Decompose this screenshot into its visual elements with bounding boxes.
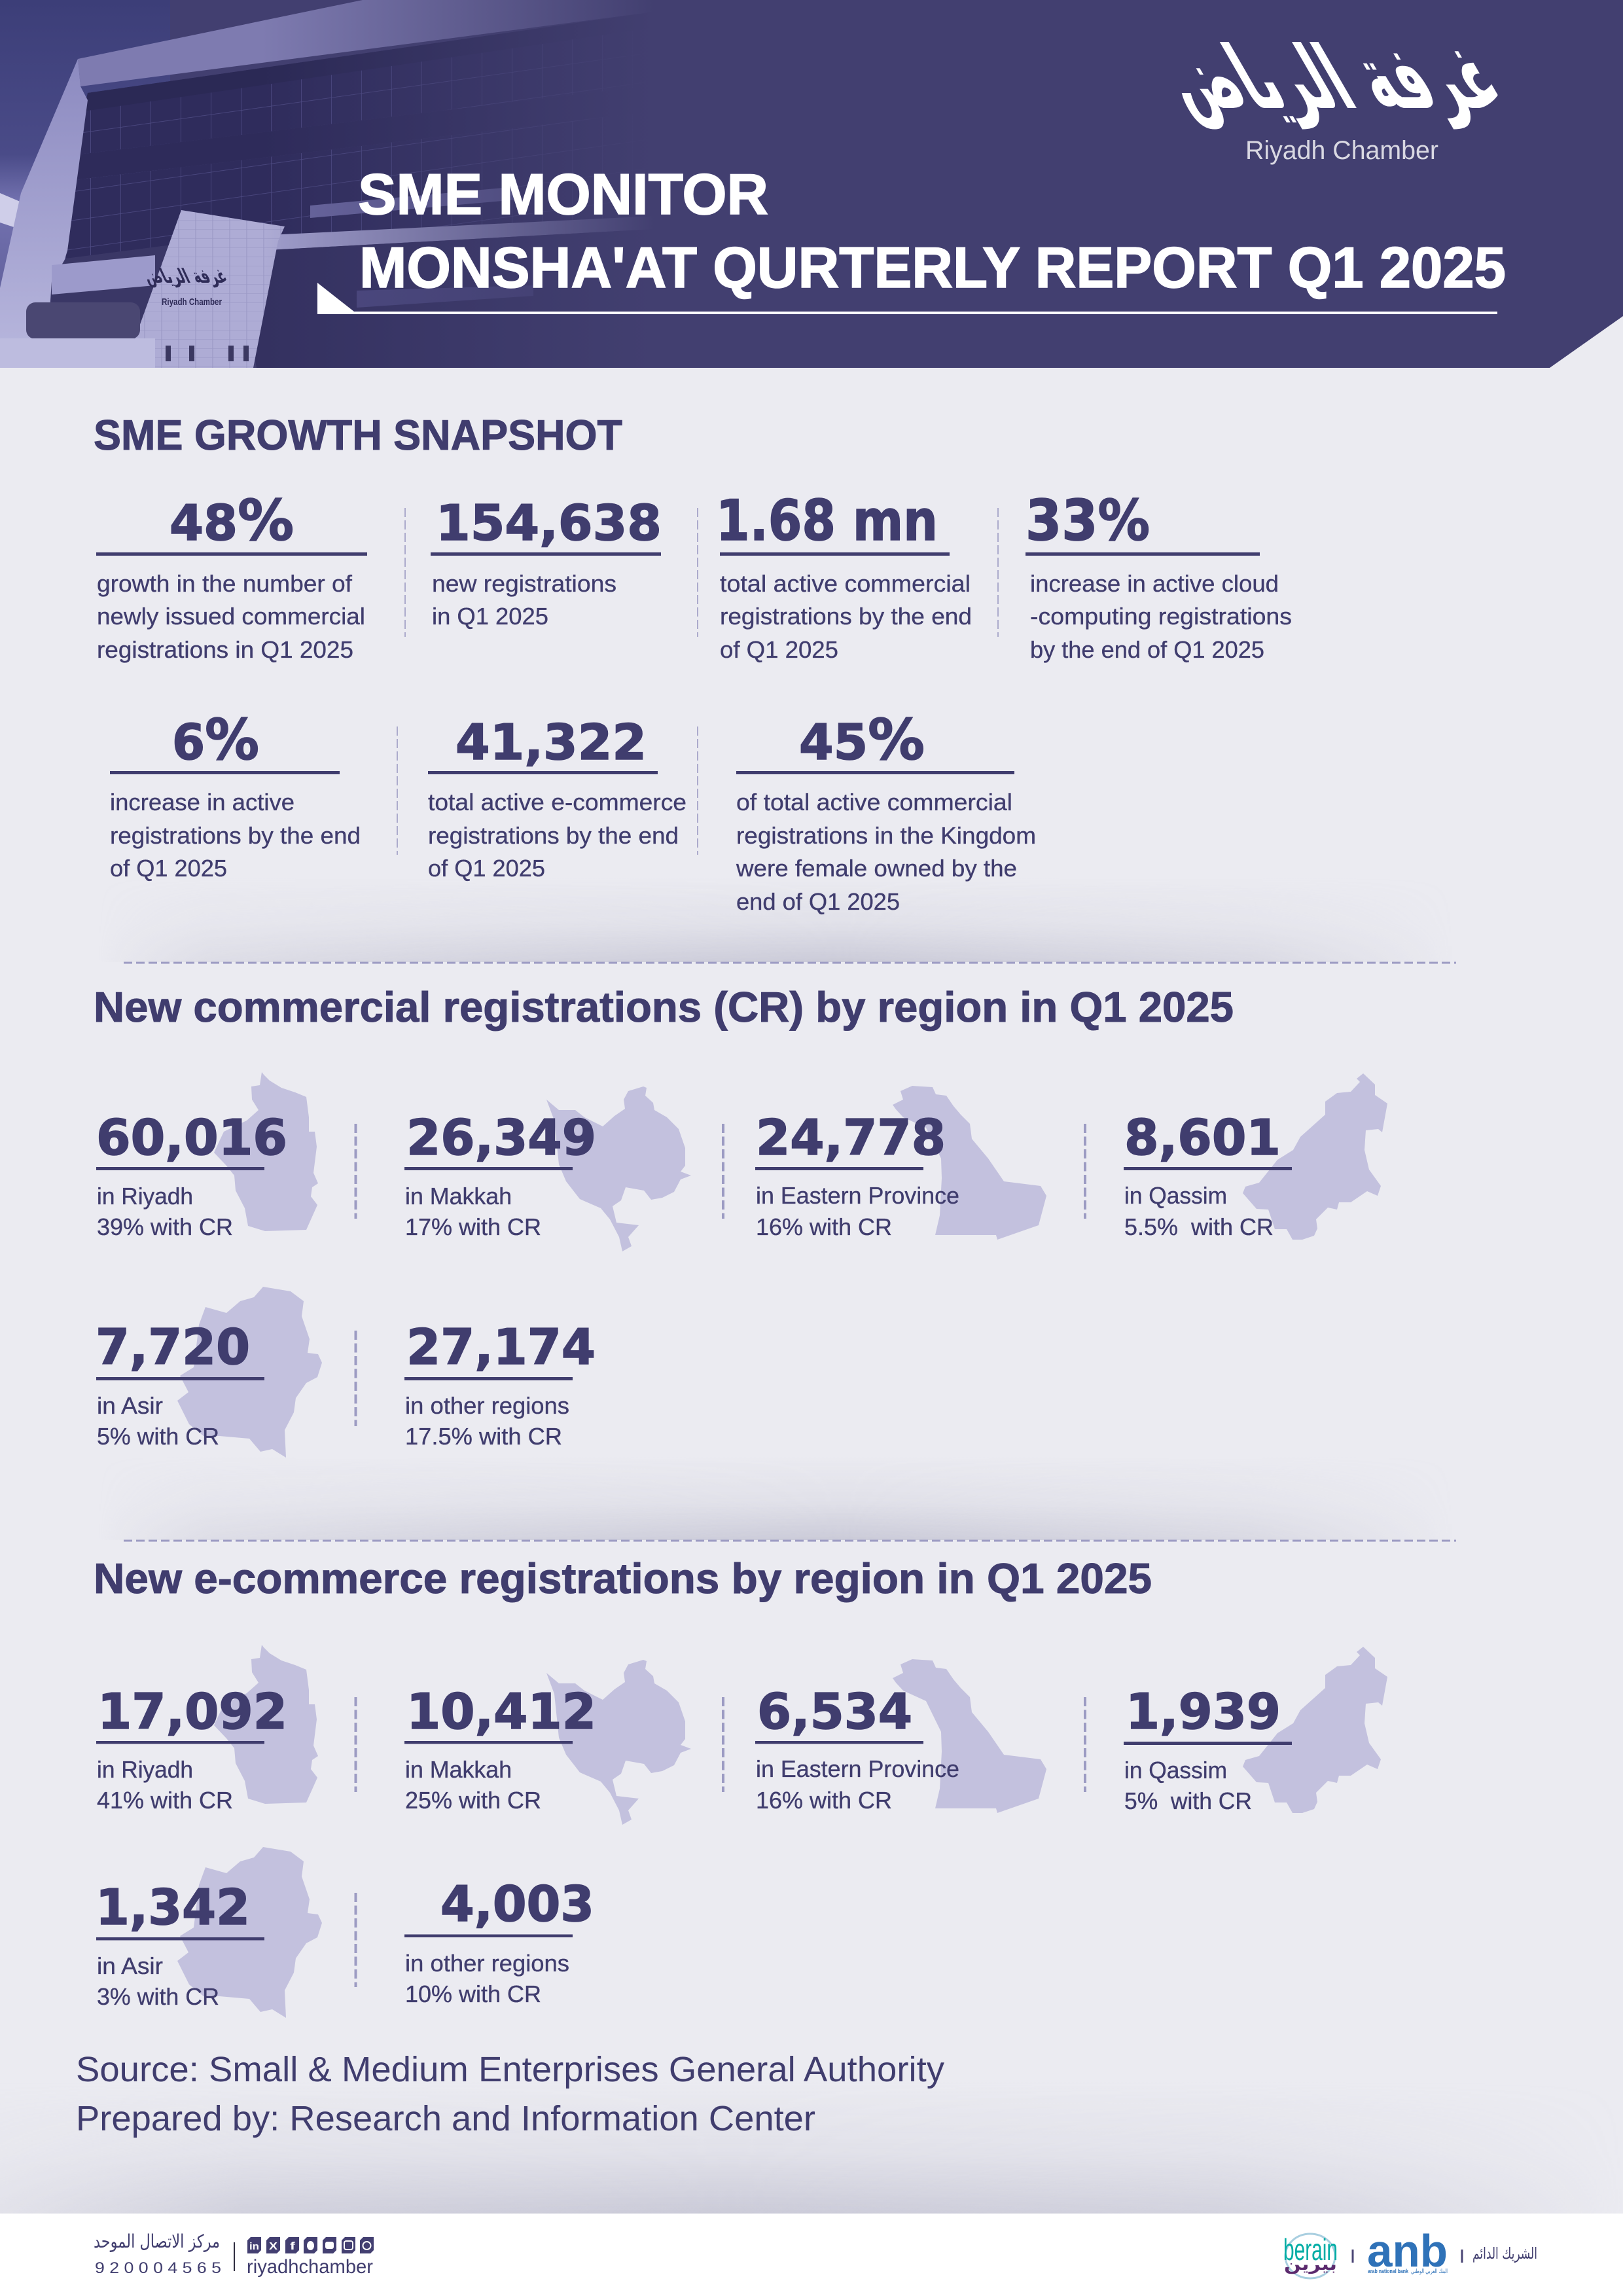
stat: Eastern Province 24,778 <box>755 1086 1046 1240</box>
stat: 33% cloud computing: 33% <box>1026 488 1150 554</box>
stat: 33% cloud computing: by the end of Q1 2025 <box>1030 636 1264 663</box>
stat: 1.68 mn active registrations: total active commercial <box>720 570 971 597</box>
stat: Riyadh 60,016 <box>96 1072 318 1240</box>
stat: Qassim 8,601: 5.5% with CR <box>1124 1213 1274 1240</box>
stat: Asir 7,720: 7,720 <box>96 1318 250 1376</box>
stat: Makkah 10,412: 10,412 <box>406 1683 596 1740</box>
stat: Eastern Province 6,534 <box>755 1659 1046 1814</box>
social handle: riyadhchamber <box>247 2256 373 2278</box>
panel: new e-commerce registrations by region <box>94 1554 1387 2018</box>
stat: other regions 4,003: 4,003 <box>440 1875 594 1933</box>
building photo <box>0 0 654 368</box>
stat: Eastern Province 6,534: 16% with CR <box>756 1787 892 1814</box>
stat: 6% active registrations: 6% <box>172 708 259 773</box>
stat: other regions 27,174: 27,174 <box>406 1318 596 1376</box>
source note: Prepared by: Research and Information Center <box>76 2099 815 2138</box>
social icons: in <box>249 2241 259 2252</box>
stat: 45% female owned <box>736 708 1036 915</box>
panel: SME growth snapshot <box>94 411 1292 915</box>
stat: Asir 1,342 <box>96 1847 322 2018</box>
heading: e-commerce registrations: New e-commerce registrations by region in Q1 2025 <box>94 1554 1152 1602</box>
social icons: X <box>269 2241 277 2252</box>
stat: Eastern Province 24,778: 16% with CR <box>756 1213 892 1240</box>
stat: Makkah 26,349: 26,349 <box>406 1109 596 1166</box>
stat: 41,322 e-commerce: 41,322 <box>455 713 647 771</box>
stat: 154,638 new registrations: in Q1 2025 <box>432 603 548 630</box>
stat: 154,638 new registrations: 154,638 <box>436 494 662 552</box>
stat: Riyadh 17,092: in Riyadh <box>97 1756 193 1783</box>
stat: Makkah 26,349: in Makkah <box>405 1183 512 1210</box>
source note <box>76 2050 944 2138</box>
stat: 48% growth: growth in the number of <box>97 570 353 597</box>
logo: berain: بيرين <box>1284 2255 1337 2274</box>
stat: Asir 1,342: in Asir <box>97 1952 163 1979</box>
stat: 45% female owned: of total active commercial <box>736 789 1012 816</box>
photo fade into banner colour <box>262 0 668 368</box>
stat: 48% growth: 48% <box>169 488 294 554</box>
stat: Qassim 8,601: in Qassim <box>1124 1182 1227 1209</box>
heading: SME growth snapshot: SME GROWTH SNAPSHOT <box>94 411 622 459</box>
heading: commercial registrations: New commercial registrations (CR) by region in Q1 2025 <box>94 983 1234 1031</box>
stat: 48% growth: newly issued commercial <box>97 603 365 630</box>
stat: other regions 4,003: 10% with CR <box>405 1981 541 2007</box>
stat: Qassim 1,939: 5% with CR <box>1124 1787 1252 1814</box>
header banner <box>0 0 1623 368</box>
footer background <box>0 2214 1623 2296</box>
logo: berain <box>1283 2233 1338 2278</box>
banner background <box>0 0 1623 368</box>
stat: 33% cloud computing: increase in active cloud <box>1030 570 1279 597</box>
panel: new commercial registrations by region <box>94 983 1387 1458</box>
logo: berain: berain <box>1283 2233 1338 2267</box>
title underline with triangle <box>317 283 1497 314</box>
social icons <box>247 2237 374 2253</box>
building photo: Riyadh Chamber <box>162 296 222 308</box>
stat: 33% cloud computing <box>1026 488 1292 663</box>
Riyadh Chamber logo <box>1138 27 1523 165</box>
stat: 1.68 mn active registrations: registrations by the end <box>720 603 972 630</box>
stat: Qassim 1,939: in Qassim <box>1124 1757 1227 1784</box>
Riyadh Chamber logo: غرفة الرياض <box>1138 27 1523 129</box>
contact centre: مركز الاتصال الموحد <box>94 2231 220 2252</box>
stat: 6% active registrations: of Q1 2025 <box>110 855 227 882</box>
permanent partner label: الشريك الدائم <box>1472 2244 1537 2263</box>
stat: Riyadh 17,092: 41% with CR <box>97 1787 233 1814</box>
stat: 41,322 e-commerce <box>428 713 687 882</box>
stat: Eastern Province 24,778: in Eastern Province <box>756 1182 959 1209</box>
stat: 45% female owned: were female owned by the <box>736 855 1017 882</box>
stat: 45% female owned: 45% <box>799 708 925 773</box>
stat: 48% growth <box>96 488 367 663</box>
stat: 6% active registrations <box>110 708 361 882</box>
stat: Makkah 10,412 <box>404 1660 691 1825</box>
stat: Asir 1,342: 3% with CR <box>97 1983 219 2010</box>
stat: 45% female owned: registrations in the Kingdom <box>736 822 1036 849</box>
stat: Makkah 26,349: 17% with CR <box>405 1213 541 1240</box>
stat: 154,638 new registrations: new registrations <box>432 570 616 597</box>
stat: other regions 27,174: 17.5% with CR <box>405 1423 562 1450</box>
building photo: غرفة الرياض <box>139 265 232 288</box>
stat: Qassim 1,939 <box>1124 1647 1387 1814</box>
stat: Eastern Province 6,534: in Eastern Province <box>756 1755 959 1782</box>
report title: SME MONITOR <box>358 162 768 226</box>
stat: Asir 7,720: in Asir <box>97 1392 163 1419</box>
stat: Riyadh 17,092 <box>96 1645 318 1814</box>
stat: Qassim 1,939: 1,939 <box>1126 1683 1281 1740</box>
report title <box>358 162 1506 300</box>
stat: 1.68 mn active registrations: 1.68 mn <box>716 488 938 554</box>
contact centre <box>94 2231 221 2277</box>
stat: 41,322 e-commerce: registrations by the end <box>428 822 679 849</box>
stat: 1.68 mn active registrations: of Q1 2025 <box>720 636 838 663</box>
stat: other regions 4,003: in other regions <box>405 1950 569 1977</box>
logo: arab national bank: arab national bank <box>1368 2268 1409 2274</box>
stat: Riyadh 60,016: 39% with CR <box>97 1213 233 1240</box>
stat: 41,322 e-commerce: of Q1 2025 <box>428 855 545 882</box>
stat: Asir 7,720: 5% with CR <box>97 1423 219 1450</box>
footer <box>0 2214 1623 2296</box>
stat: Asir 1,342: 1,342 <box>96 1878 250 1936</box>
stat: 48% growth: registrations in Q1 2025 <box>97 636 353 663</box>
stat: Eastern Province 24,778: 24,778 <box>756 1109 946 1166</box>
stat: Makkah 10,412: in Makkah <box>405 1756 512 1783</box>
stat: Asir 7,720 <box>96 1287 322 1458</box>
stat: Qassim 8,601 <box>1124 1073 1387 1240</box>
stat: other regions 27,174: in other regions <box>405 1392 569 1419</box>
stat: other regions 27,174 <box>404 1318 596 1450</box>
stat: Qassim 8,601: 8,601 <box>1124 1109 1281 1166</box>
stat: Eastern Province 6,534: 6,534 <box>757 1683 912 1740</box>
stat: 6% active registrations: registrations by the end <box>110 822 361 849</box>
social icons: f <box>290 2240 295 2252</box>
stat: Riyadh 60,016: in Riyadh <box>97 1183 193 1210</box>
stat: Riyadh 17,092: 17,092 <box>98 1683 287 1740</box>
logo: arab national bank: anb <box>1367 2225 1448 2276</box>
stat: 45% female owned: end of Q1 2025 <box>736 888 900 915</box>
Riyadh Chamber logo: Riyadh Chamber <box>1245 136 1438 165</box>
stat: Makkah 26,349 <box>404 1086 691 1251</box>
stat: 6% active registrations: increase in active <box>110 789 294 816</box>
stat: 154,638 new registrations <box>431 494 662 630</box>
stat: Makkah 10,412: 25% with CR <box>405 1787 541 1814</box>
report title: MONSHA'AT QURTERLY REPORT Q1 2025 <box>359 235 1506 300</box>
logo: arab national bank: البنك العربي الوطني <box>1411 2269 1448 2275</box>
stat: Riyadh 60,016: 60,016 <box>96 1109 287 1166</box>
source note: Source: Small & Medium Enterprises General Authority <box>76 2050 944 2089</box>
stat: 1.68 mn active registrations <box>716 488 972 663</box>
contact centre: 9 2 0 0 0 4 5 6 5 <box>95 2259 221 2277</box>
stat: other regions 4,003 <box>404 1875 594 2007</box>
stat: 41,322 e-commerce: total active e-commerce <box>428 789 687 816</box>
stat: 33% cloud computing: -computing registrations <box>1030 603 1292 630</box>
